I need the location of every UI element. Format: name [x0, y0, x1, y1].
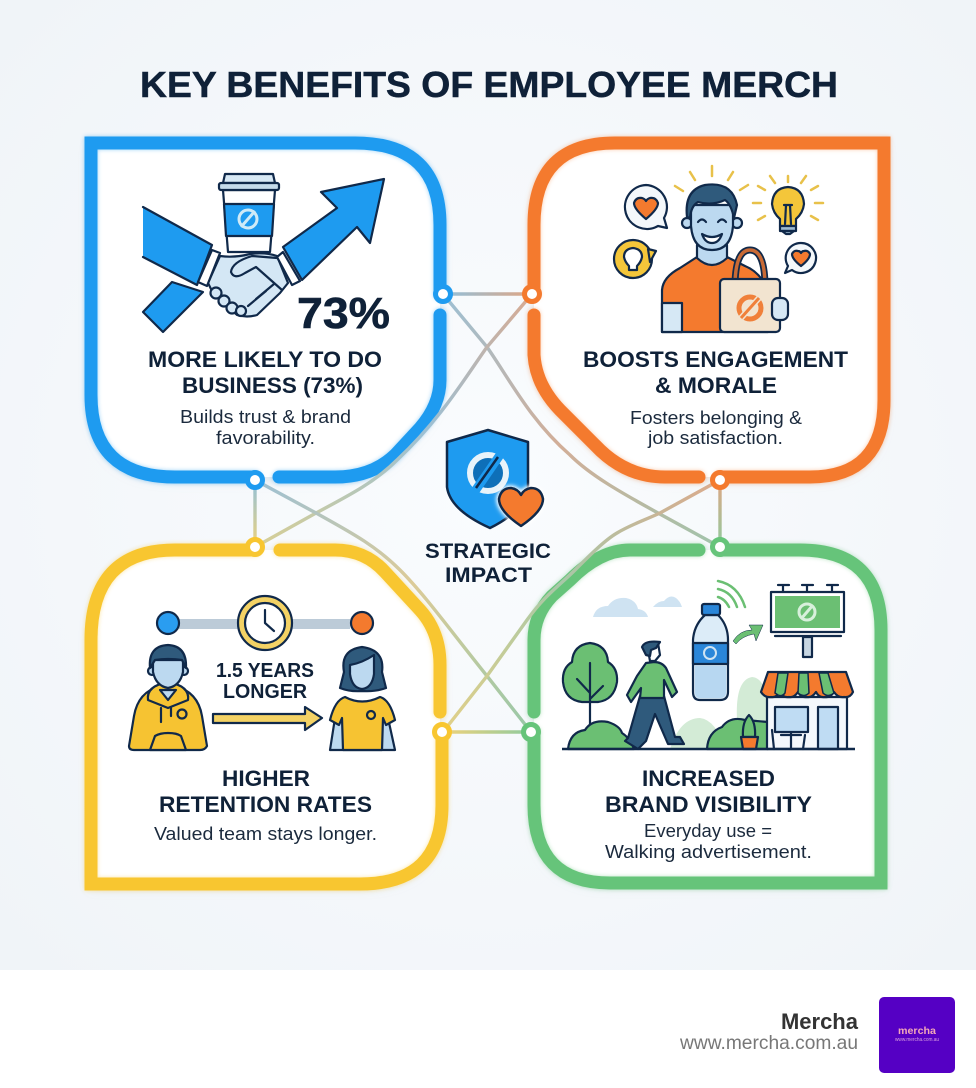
callout: 1.5 years longer: 1.5 YEARS: [216, 660, 314, 682]
icon: bulb speech bubble: [614, 240, 656, 278]
stat: 73%: 73%: [297, 289, 390, 338]
callout: 1.5 years longer: [216, 660, 314, 703]
icon: coffee cup: [219, 174, 279, 252]
heading: MORE LIKELY TO DO: [148, 347, 382, 372]
icon: small heart bubble: [785, 243, 816, 273]
icon: water bottle: [693, 604, 728, 700]
callout: 1.5 years longer: LONGER: [223, 681, 308, 703]
card frame: [534, 143, 884, 477]
ground line: [562, 748, 855, 750]
icon: background hills: [670, 677, 770, 749]
description: job satisfaction.: [647, 428, 783, 448]
card background: [91, 143, 440, 477]
center: strategic impact: [425, 430, 551, 587]
node: yellow top: [248, 540, 262, 554]
icon: clock: [238, 596, 292, 650]
description: Walking advertisement.: [605, 842, 812, 862]
brand name: Mercha: [781, 1009, 859, 1034]
icon: billboard: [771, 585, 844, 657]
icon: heart: [499, 488, 543, 526]
panel: higher retention rates: [91, 550, 442, 884]
icon: timeline bar: [179, 619, 350, 629]
node: orange left: [524, 286, 540, 302]
panel: more likely to do business: [91, 143, 440, 477]
logo tile: mercha: [898, 1026, 936, 1037]
icon: end dot: [351, 612, 373, 634]
icon: person in t-shirt: [330, 647, 395, 750]
label: [425, 540, 551, 587]
heading: [148, 347, 382, 398]
icon: growth arrow: [283, 179, 384, 280]
card background: [91, 550, 440, 884]
heading: BRAND VISIBILITY: [605, 792, 812, 817]
icon: person in hoodie: [129, 645, 207, 750]
label: STRATEGIC: [425, 540, 551, 563]
footer: [0, 970, 976, 1088]
website: www.mercha.com.au: [679, 1032, 858, 1054]
description: Fosters belonging &: [630, 408, 802, 428]
card frame: [534, 550, 881, 883]
icon: rays: [675, 166, 748, 191]
description: Valued team stays longer.: [154, 824, 377, 844]
heading: [605, 766, 812, 817]
logo tile: [879, 997, 955, 1073]
icon: shield: [447, 430, 528, 528]
icon: handshake: [198, 250, 300, 316]
card frame: [91, 550, 442, 884]
node: orange bottom: [712, 472, 728, 488]
description: [630, 408, 802, 448]
node: green top: [712, 540, 728, 554]
logo tile: www.mercha.com.au: [895, 1037, 939, 1043]
heading: [159, 766, 372, 817]
heading: INCREASED: [642, 766, 775, 791]
icon: light bulb: [753, 176, 823, 234]
icon: bushes: [568, 719, 768, 749]
heading: & MORALE: [655, 373, 777, 398]
icon: person: [662, 184, 768, 332]
node: yellow right: [434, 724, 450, 740]
heading: RETENTION RATES: [159, 792, 372, 817]
icon: start dot: [157, 612, 179, 634]
icon: clouds: [593, 597, 682, 617]
icon: walking person: [625, 642, 684, 749]
card background: [534, 550, 881, 883]
heading: [583, 347, 849, 398]
arrow: [213, 707, 322, 730]
description: Builds trust & brand: [180, 407, 351, 427]
connector network: [248, 286, 728, 740]
heading: BUSINESS (73%): [182, 373, 363, 398]
panel: increased brand visibility: [534, 550, 881, 883]
arrow: [733, 625, 763, 644]
card frame: [91, 143, 440, 477]
label: IMPACT: [445, 564, 532, 587]
icon: signal waves: [718, 581, 745, 607]
node: green left: [524, 724, 538, 740]
icon: left sleeve: [143, 207, 212, 285]
description: [605, 821, 812, 862]
node: blue bottom: [248, 472, 262, 488]
node: blue right: [436, 286, 450, 302]
icon: potted plant: [741, 715, 758, 749]
heading: HIGHER: [222, 766, 310, 791]
card background: [534, 143, 884, 477]
description: favorability.: [216, 428, 315, 448]
icon: tote bag: [720, 250, 788, 332]
icon: heart speech bubble: [625, 185, 667, 229]
icon: lower sleeve: [143, 282, 203, 332]
description: Everyday use =: [644, 821, 772, 841]
panel: boosts engagement and morale: [534, 143, 884, 477]
icon: storefront: [761, 672, 853, 749]
icon: tree: [563, 643, 617, 727]
footer background: [0, 970, 976, 1088]
description: [180, 407, 351, 448]
heading: BOOSTS ENGAGEMENT: [583, 347, 849, 372]
title: KEY BENEFITS OF EMPLOYEE MERCH: [140, 64, 838, 105]
